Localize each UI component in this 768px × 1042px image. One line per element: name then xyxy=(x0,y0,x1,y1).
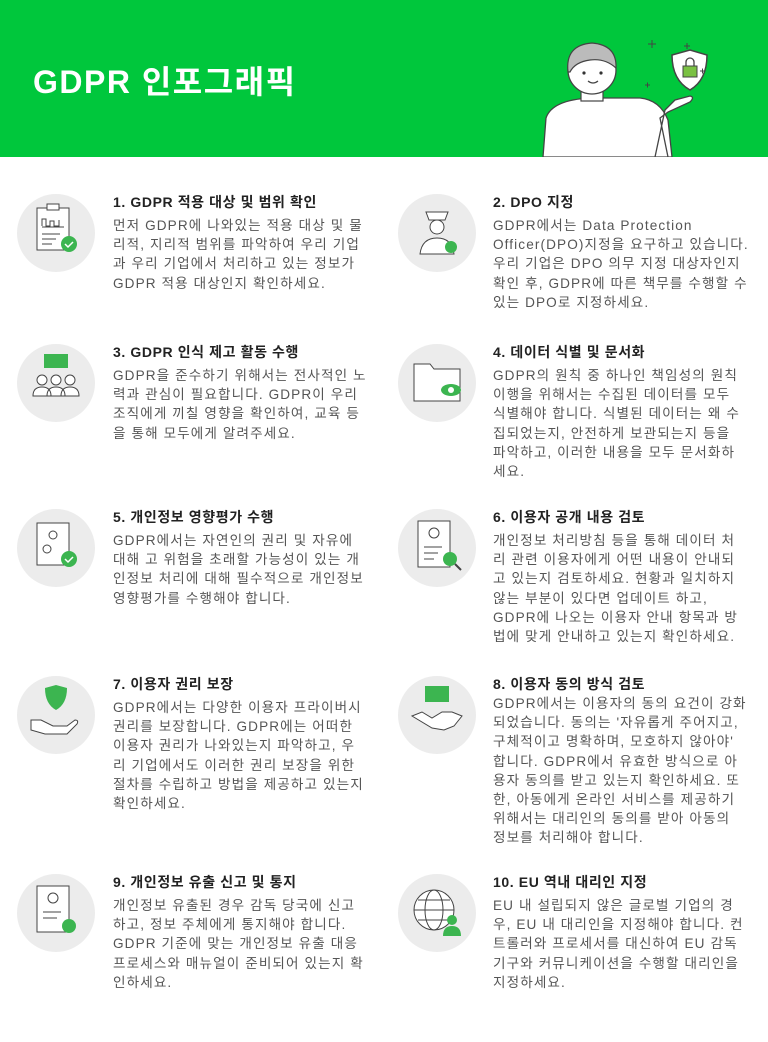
text: 하고, 정보 주체에게 통지해야 합니다. xyxy=(113,917,346,932)
text: 대해 고 위험을 초래할 가능성이 있는 개 xyxy=(113,552,360,567)
text: GDPR에서는 이용자의 동의 요건이 강화 xyxy=(493,696,747,711)
text: 개인정보 처리방침 등을 통해 데이터 처 xyxy=(493,533,735,548)
heading: 4. 데이터 식별 및 문서화 xyxy=(493,344,645,360)
heading: 2. DPO 지정 xyxy=(493,194,574,210)
text: GDPR 기준에 맞는 개인정보 유출 대응 xyxy=(113,936,358,951)
text: 않는 부분이 있다면 업데이트 하고, xyxy=(493,591,708,606)
title: GDPR 인포그래픽 xyxy=(33,64,297,100)
text: 영향평가를 수행해야 합니다. xyxy=(113,591,291,606)
text: 용자 동의를 받고 있는지 확인하세요. 또 xyxy=(493,773,740,788)
text: 을 통해 모두에게 알려주세요. xyxy=(113,426,296,441)
item 4 xyxy=(398,344,740,479)
text: 지정하세요. xyxy=(493,975,566,990)
text: GDPR 적용 대상인지 확인하세요. xyxy=(113,276,326,291)
text: GDPR에 나오는 이용자 안내 항목과 방 xyxy=(493,610,738,625)
text xyxy=(493,533,738,644)
text: 인정보 처리에 대해 필수적으로 개인정보 xyxy=(113,571,364,586)
text: 위해서는 대리인의 동의를 받아 아동의 xyxy=(493,811,730,826)
text: 과 우리 기업에서 처리하고 있는 정보가 xyxy=(113,256,355,271)
item 6 xyxy=(398,509,738,644)
heading: 8. 이용자 동의 방식 검토 xyxy=(493,676,645,692)
icon: assessment xyxy=(17,509,95,587)
heading: 10. EU 역내 대리인 지정 xyxy=(493,874,647,890)
item 1 xyxy=(17,194,363,291)
text: 력과 관심이 필요합니다. GDPR이 우리 xyxy=(113,387,358,402)
heading: 9. 개인정보 유출 신고 및 통지 xyxy=(113,874,297,890)
text: 고 있는지 검토하세요. 현황과 일치하지 xyxy=(493,571,735,586)
text: 확인 후, GDPR에 따른 책무를 수행할 수 xyxy=(493,276,748,291)
text xyxy=(493,368,740,479)
text: 먼저 GDPR에 나와있는 적용 대상 및 물 xyxy=(113,218,363,233)
text: 세요. xyxy=(493,464,525,479)
text: 이용자 권리가 나와있는지 파악하고, 우 xyxy=(113,738,355,753)
text: 한, 아동에게 온라인 서비스를 제공하기 xyxy=(493,792,735,807)
item 8 xyxy=(398,676,747,845)
text: GDPR에서는 자연인의 권리 및 자유에 xyxy=(113,533,353,548)
text: 합니다. GDPR에서 유효한 방식으로 아 xyxy=(493,754,738,769)
text: 이행을 위해서는 수집된 데이터를 모두 xyxy=(493,387,730,402)
text: 집되었는지, 안전하게 보관되는지 등을 xyxy=(493,426,730,441)
text: 정보를 처리해야 합니다. xyxy=(493,830,644,845)
item 9 xyxy=(17,874,364,990)
text: GDPR을 준수하기 위해서는 전사적인 노 xyxy=(113,368,367,383)
text xyxy=(113,533,364,606)
text: 식별해야 합니다. 식별된 데이터는 왜 수 xyxy=(493,406,740,421)
heading: 7. 이용자 권리 보장 xyxy=(113,676,234,692)
text: 리 관련 이용자에게 어떤 내용이 안내되 xyxy=(493,552,735,567)
item 10 xyxy=(398,874,744,990)
text xyxy=(493,696,747,845)
text: 법에 맞게 안내하고 있는지 확인하세요. xyxy=(493,629,735,644)
text: 권리를 보장합니다. GDPR에는 어떠한 xyxy=(113,719,353,734)
text: 프로세스와 매뉴얼이 준비되어 있는지 확 xyxy=(113,956,364,971)
text: 기구와 커뮤니케이션을 수행할 대리인을 xyxy=(493,956,739,971)
text: Officer(DPO)지정을 요구하고 있습니다. xyxy=(493,237,749,252)
text: EU 내 설립되지 않은 글로벌 기업의 경 xyxy=(493,898,734,913)
text: 우리 기업은 DPO 의무 지정 대상자인지 xyxy=(493,256,741,271)
text: GDPR에서는 다양한 이용자 프라이버시 xyxy=(113,700,362,715)
item 2 xyxy=(398,194,749,310)
text: 우, EU 내 대리인을 지정해야 합니다. 컨 xyxy=(493,917,744,932)
text: 개인정보 유출된 경우 감독 당국에 신고 xyxy=(113,898,355,913)
text xyxy=(493,898,744,990)
icon: globe representative xyxy=(398,874,476,952)
icon: breach report xyxy=(17,874,95,952)
heading: 6. 이용자 공개 내용 검토 xyxy=(493,509,645,525)
icon: notice search xyxy=(398,509,476,587)
text: GDPR에서는 Data Protection xyxy=(493,218,693,233)
text xyxy=(493,218,749,310)
text: 트롤러와 프로세서를 대신하여 EU 감독 xyxy=(493,936,738,951)
text: 구체적이고 명확하며, 모호하지 않아야' xyxy=(493,734,734,749)
icon: handshake xyxy=(398,676,476,754)
icon: hand shield xyxy=(17,676,95,754)
text: 인하세요. xyxy=(113,975,172,990)
text: 확인하세요. xyxy=(113,796,186,811)
icon: folder eye xyxy=(398,344,476,422)
text: GDPR의 원칙 중 하나인 책임성의 원칙 xyxy=(493,368,738,383)
text: 리 기업에서도 이러한 권리 보장을 위한 xyxy=(113,758,355,773)
item 7 xyxy=(17,676,364,811)
icon: officer xyxy=(398,194,476,272)
item 5 xyxy=(17,509,364,606)
text xyxy=(113,898,364,990)
text: 조직에게 끼칠 영향을 확인하여, 교육 등 xyxy=(113,406,360,421)
heading: 3. GDPR 인식 제고 활동 수행 xyxy=(113,344,299,360)
text xyxy=(113,368,367,441)
icon: clipboard xyxy=(17,194,95,272)
icon: people xyxy=(17,344,95,422)
illustration: person holding shield xyxy=(542,40,708,157)
heading: 5. 개인정보 영향평가 수행 xyxy=(113,509,274,525)
text: 있는 DPO로 지정하세요. xyxy=(493,295,649,310)
text xyxy=(113,218,363,291)
text: 되었습니다. 동의는 '자유롭게 주어지고, xyxy=(493,715,739,730)
heading: 1. GDPR 적용 대상 및 범위 확인 xyxy=(113,194,317,210)
text: 파악하고, 이러한 내용을 모두 문서화하 xyxy=(493,445,735,460)
text: 절차를 수립하고 방법을 제공하고 있는지 xyxy=(113,777,364,792)
item 3 xyxy=(17,344,367,441)
text xyxy=(113,700,364,811)
text: 리적, 지리적 범위를 파악하여 우리 기업 xyxy=(113,237,360,252)
header band xyxy=(0,0,768,157)
